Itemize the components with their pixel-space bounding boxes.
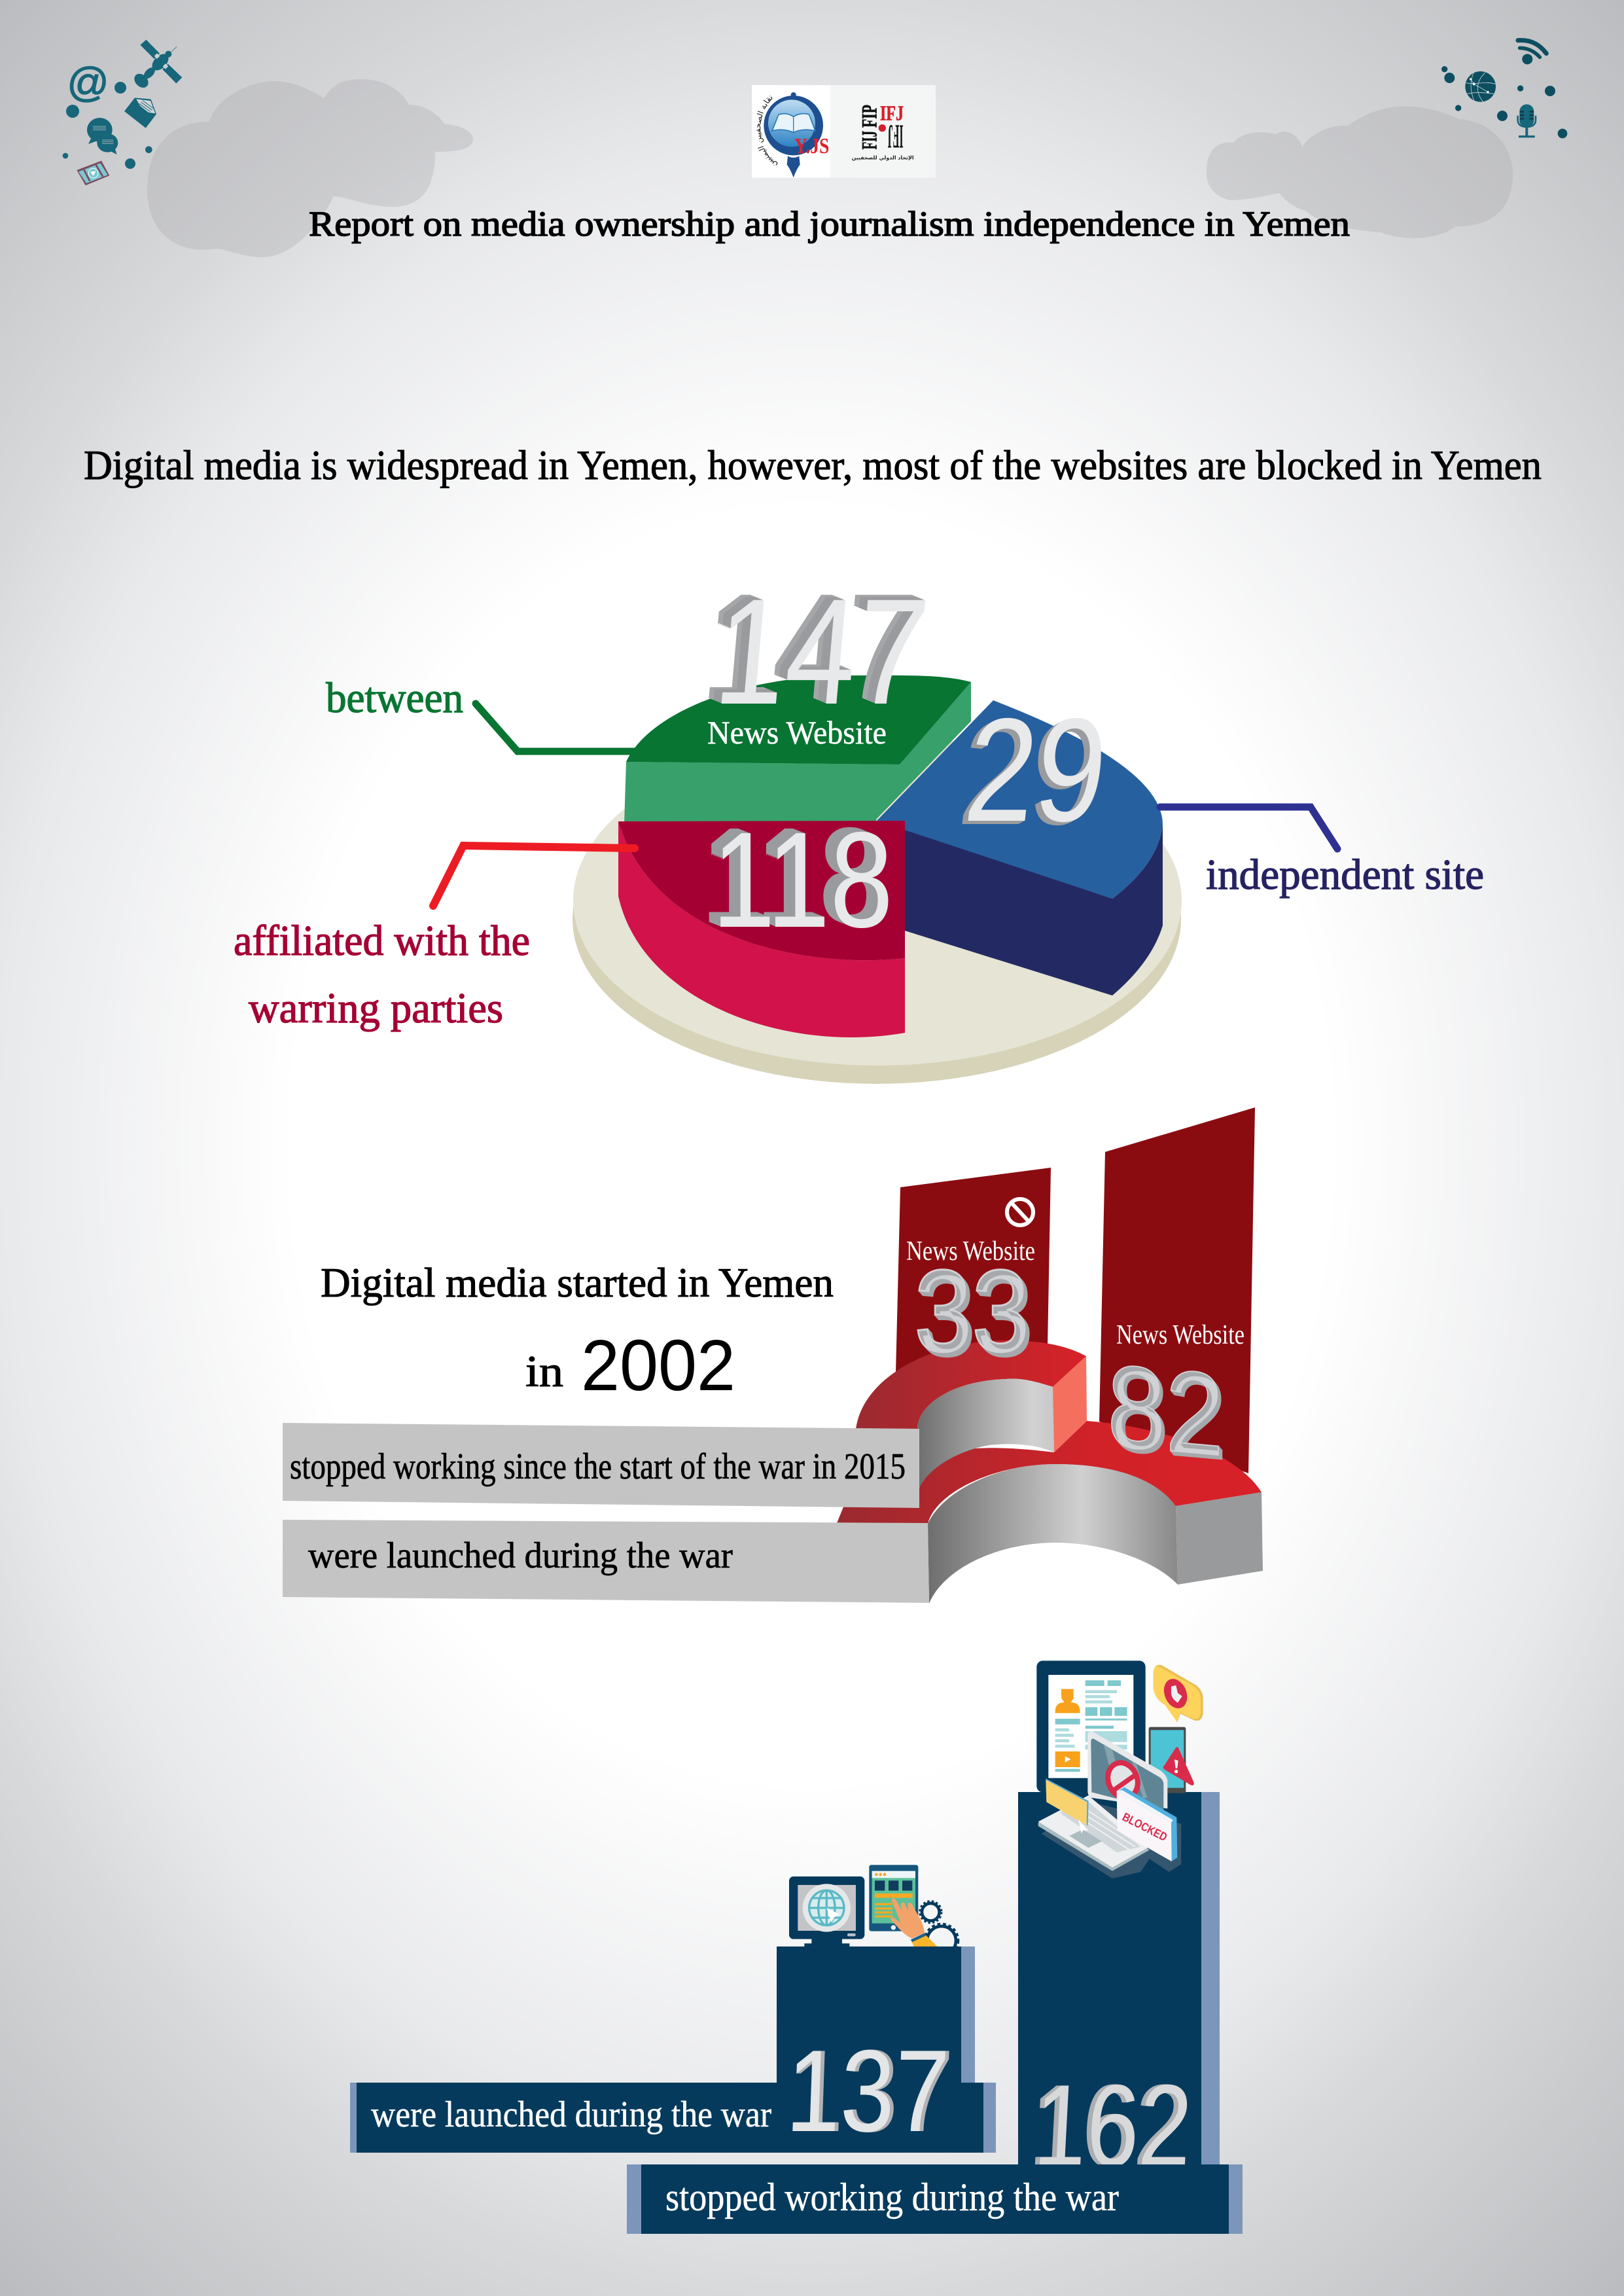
icon: globe: [1465, 71, 1496, 102]
phone with warning: [1149, 1727, 1194, 1793]
icons: satellite, email, chat, film cluster: [63, 40, 182, 185]
pie slice: between: [624, 675, 971, 823]
decorative dots: [63, 82, 152, 169]
icon: monitor, tablet and gears: [789, 1865, 958, 1957]
number: 162: 162: [1031, 2060, 1195, 2191]
icon: envelope: [124, 98, 156, 128]
cloud: right: [1207, 106, 1513, 238]
yellow card and cursor: [1046, 1778, 1089, 1834]
chart: 3D pie of 147 news websites: [234, 567, 1484, 1084]
icon: microphone: [1518, 104, 1536, 137]
label: News Website 33: News Website: [906, 1236, 1035, 1266]
column: 137: [777, 1946, 975, 2087]
icons: wifi, globe, microphone cluster: [1441, 40, 1567, 138]
grey label bar: were launched: were launched during the war: [308, 1535, 733, 1576]
number: 33: 33: [914, 1246, 1029, 1376]
label: independent site: independent site: [1206, 851, 1484, 899]
icon: wifi: [1518, 40, 1546, 64]
grey label bar: stopped working: stopped working since the start of the war in 2015: [290, 1446, 906, 1487]
speech bubble with hand: [1154, 1665, 1203, 1723]
pie base plate: [573, 736, 1182, 1084]
decorative dots: [1441, 66, 1567, 138]
logo: IFJ: الإتحاد الدولي للصحفيين: [852, 154, 914, 160]
pie slice: affiliated: [618, 821, 905, 1037]
cloud: left: [147, 79, 473, 257]
logos: [752, 85, 936, 178]
column: 162: [1018, 1792, 1220, 2165]
text: in 2002: 2002: [581, 1325, 735, 1406]
tablet: [869, 1865, 918, 1931]
arc step: upper: [856, 1340, 1087, 1488]
icon: satellite: [132, 40, 182, 90]
logo: IFJ: FIP: [858, 105, 881, 128]
label: affiliated with the warring parties: affiliated with the: [234, 917, 530, 965]
text: in 2002: in: [525, 1346, 563, 1396]
chart: stepped arcs of news websites: [283, 1107, 1263, 1604]
leader line: between: [476, 704, 751, 751]
label: News Website 82: News Website: [1116, 1320, 1244, 1350]
subtitle: Digital media is widespread in Yemen, however, most of the websites are blocked in Yemen: [84, 442, 1542, 488]
band: were launched during the war: [350, 2083, 996, 2153]
title: Report on media ownership and journalism independence in Yemen: [309, 204, 1350, 243]
grey label bar: were launched: [283, 1520, 929, 1603]
blocked window card: [1117, 1787, 1177, 1861]
logo: IFJ: IFJ: [880, 101, 904, 124]
number: 137: 137: [785, 2026, 951, 2156]
label: between: between: [326, 674, 463, 722]
icon: film: [77, 161, 109, 185]
number: 82: 82: [1107, 1340, 1224, 1480]
blocked window card: BLOCKED: [1120, 1810, 1169, 1844]
leader line: independent: [1160, 807, 1337, 849]
monitor: [789, 1876, 864, 1946]
icon: blocked sign: [1007, 1199, 1033, 1225]
arc step: lower: [928, 1464, 1263, 1604]
bar panel: 33: [896, 1168, 1051, 1372]
logo: Yemeni Journalists Syndicate: [756, 92, 829, 178]
number: 29: 29: [959, 688, 1114, 852]
tablet page: [1036, 1660, 1146, 1792]
label: affiliated with the warring parties: [234, 917, 530, 1032]
logo: IFJ: [852, 101, 914, 160]
band: stopped working during the war: stopped working during the war: [665, 2176, 1119, 2219]
band: stopped working during the war: [627, 2164, 1243, 2234]
chart: launched vs stopped during the war: [350, 1660, 1243, 2234]
icon: blocked devices: [1036, 1660, 1203, 1878]
arc step: lower red: [837, 1421, 1262, 1524]
gears: [920, 1901, 958, 1957]
bar panel: 82: [1099, 1107, 1255, 1473]
label: News Website: News Website: [707, 714, 887, 751]
laptop: [1038, 1731, 1181, 1878]
logo: Yemeni Journalists Syndicate: Y.JS: [794, 134, 829, 158]
pie slice: independent: [877, 700, 1163, 996]
leader line: affiliated: [433, 846, 635, 906]
number: 118: 118: [712, 804, 893, 956]
icon: chat bubbles: [87, 118, 118, 154]
text: Digital media started: Digital media started in Yemen: [321, 1260, 834, 1306]
label: affiliated with the warring parties: warring parties: [249, 984, 503, 1032]
grey label bar: stopped working: [283, 1423, 919, 1508]
number: 147: 147: [709, 567, 934, 736]
icon: at sign: @: [67, 60, 109, 105]
band: were launched during the war: were launched during the war: [371, 2094, 771, 2135]
logo: IFJ: IFJ: [888, 118, 904, 155]
hand: [891, 1899, 937, 1946]
logo: Yemeni Journalists Syndicate: نقابة الصحفيين اليمنيين: [756, 96, 777, 166]
logo: IFJ: FIJ: [858, 131, 881, 149]
